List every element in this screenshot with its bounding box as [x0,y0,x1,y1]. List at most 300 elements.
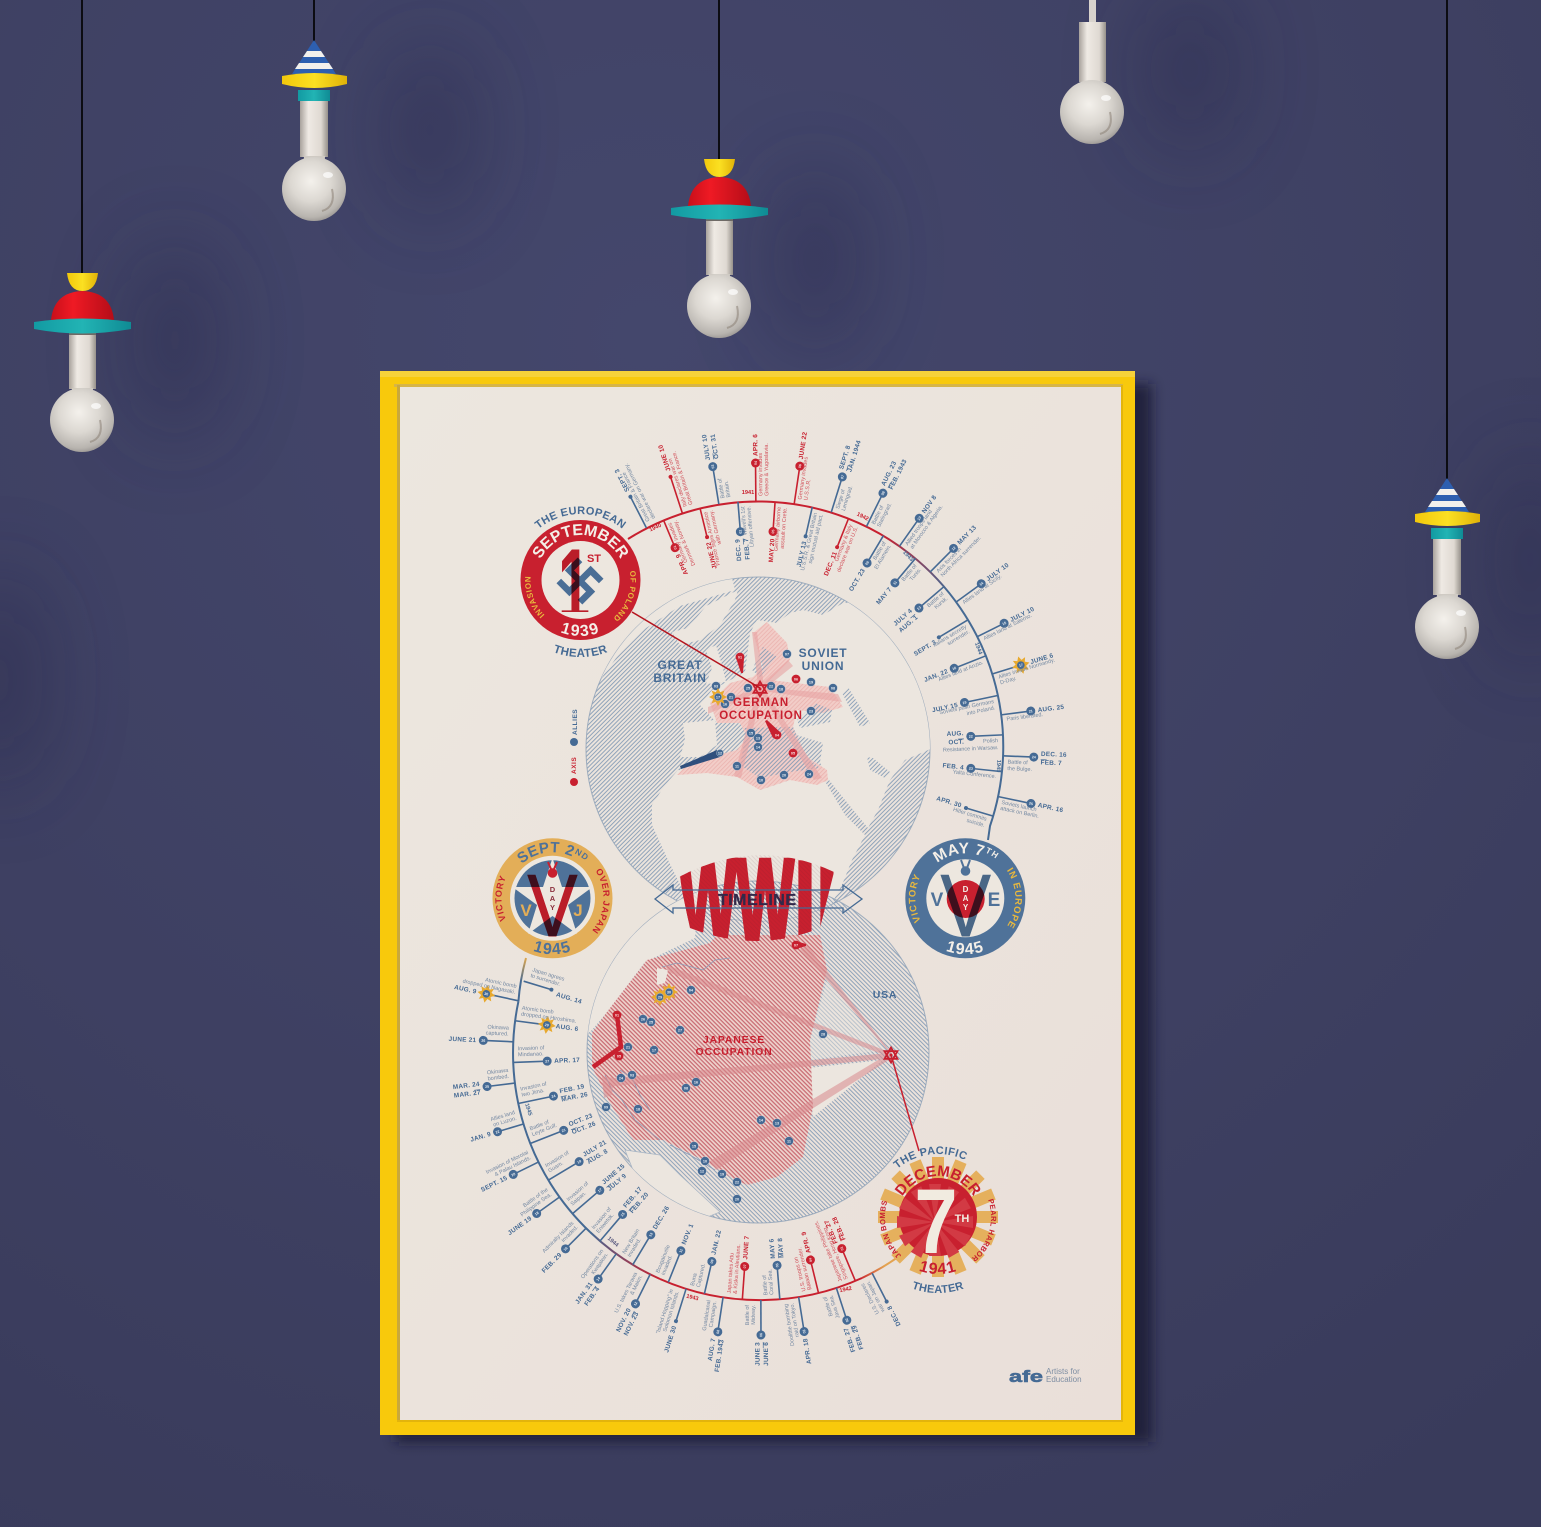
event: Okinawa captured [448,1023,514,1046]
badge: V-E day: A [963,894,969,903]
event: Crete: MAY 20 [768,538,777,563]
timeline years: Pacific [523,1103,853,1302]
label: German occupation: OCCUPATION [719,710,803,722]
event: Philippines, Singapore: 01 [839,1246,845,1251]
event: North Africa surrender: North Africa surrender. [940,535,983,578]
event: Sept 3: SEPT. 3 [614,467,631,493]
event: Mindanao: APR. 17 [554,1057,580,1065]
event: war on US: DEC. 11 [823,551,839,577]
event: Stalingrad: AUG. 23 [880,460,898,487]
marker: invasion of Poland star [754,682,766,696]
event: Kwajalein [566,1245,624,1310]
event: Attack on Berlin: attack on Berlin. [1000,806,1040,820]
event: Buna: Captured. [696,1263,707,1288]
event: Attack on Berlin: APR. 16 [1037,802,1064,814]
markers: atomic bomb stars [651,983,678,1006]
event: Anzio: 16 [952,666,957,671]
event: June 22 USSR: Germany invades [797,456,810,500]
land: Spain [680,720,717,757]
event: Java Sea: FEB. 27 [843,1327,857,1353]
label: Soviet Union: UNION [802,659,844,673]
event: Tunis: 11 [892,580,898,586]
event: Guadalcanal [696,1295,732,1373]
event: Tunis [874,555,926,613]
event: Battle of Britain: OCT. 31 [710,433,721,459]
marker: allied landing wedge: 12 [718,751,722,755]
lower globe: Pacific [580,870,929,1223]
event: Battle of the Bulge: 24 [1032,755,1036,759]
event: Sept 3: Great Britain & France [621,471,652,522]
event: Kwajalein: Kwajalein. [591,1252,610,1276]
event: Crete: Germany airborne [774,507,783,551]
event: June 22 USSR: 06 [798,464,802,468]
event: Battle of the Bulge: the Bulge. [1007,766,1033,773]
map markers Pacific: 17 [652,1048,656,1052]
event: Battle of Britain: JULY 10 [701,434,712,461]
event: North Africa surrender: Axis forces in [936,547,963,574]
event: Libyan offensive [731,501,757,561]
event: Midway: JUNE 3 [755,1342,762,1366]
event: Hiroshima: 29 [545,1023,549,1027]
markers: atomic bomb stars: 30 [667,990,671,994]
occupied Europe [677,622,843,790]
legend: axis and allies [570,709,579,786]
land: Africa [652,770,865,925]
event: Morotai: Invasion of Morotai [485,1150,529,1176]
event: Anzio: Allies land at Anzio. [938,660,985,683]
event: Okinawa bombed: MAR. 27 [454,1089,481,1100]
event: Okinawa bombed: Okinawa [487,1068,510,1076]
event: Libyan offensive: Libyan offensive. [746,505,756,547]
map markers Europe: 20 [782,773,786,777]
event: Warsaw: AUG. [947,730,964,738]
event: Attu and Kiska: Japan takes Attu [727,1253,736,1294]
event: Morocco and Algeria: at Morocco & Algeria. [909,504,945,550]
event: Soviets into Poland: 19 [962,700,967,705]
badge: V-E day: IN EUROPE [1007,867,1022,928]
event: New Britain: invaded. [627,1237,643,1258]
event: Morotai: SEPT. 15 [480,1175,509,1194]
event: Saipan: Invasion of [566,1181,590,1203]
event: Nagasaki: dropped on Nagasaki. [462,979,516,996]
event: Doolittle: raid on Tokyo. [789,1302,801,1337]
map markers Europe: 11 [735,764,739,768]
event: June 10: Great Britain & France. [671,450,695,506]
event: Sept 3 [613,462,659,529]
event: Luzon: on Luzon. [493,1116,518,1129]
map markers Pacific: 26 [641,1017,645,1021]
event: Battle of the Bulge: Battle of [1007,760,1028,766]
timeline years: European: 1940 [649,523,663,533]
timeline arc: Pacific theater [513,958,898,1300]
map markers Europe: 21 [729,695,733,699]
event: North Africa surrender: MAY 13 [956,524,978,546]
event: Philippine Sea [499,1184,562,1237]
event: Philippines, Singapore: FEB. 28 [831,1215,847,1241]
land: Australia [625,1150,720,1218]
event: Mindanao: 27 [545,1059,549,1064]
event: Stalingrad: FEB. 1943 [888,458,909,491]
event: Kursk: 13 [916,605,922,611]
badge: V-J day: OVER JAPAN [592,868,610,934]
event: Philippine Sea: 18 [534,1211,540,1217]
timeline years: European: 1945 [995,760,1001,772]
map markers Europe: 07 [785,652,789,656]
event: Admiralty Islands [531,1217,589,1275]
map markers Europe [712,650,837,784]
event: Midway: Midway. [751,1305,757,1325]
event: Okinawa bombed: 25 [485,1085,489,1089]
event: Midway: JUNE 6 [763,1342,770,1366]
event: Soviets into Poland [931,691,1001,724]
event: Nagasaki: 30 [484,992,489,996]
poster paper [400,387,1121,1420]
poster frame [380,371,1152,1442]
event: mutual aid pact: sign mutual aid pact. [808,513,825,564]
timeline arc: European theater [628,502,1003,840]
coastlines [605,958,730,1170]
map markers Pacific: 22 [735,1180,739,1184]
event: France armistice: JUNE 22 [705,541,719,570]
event: Guam: AUG. 8 [586,1148,609,1166]
event: Eniwetok: FEB. 17 [622,1186,644,1209]
event: Tarawa: 12 [633,1301,638,1307]
event: Crete: assault on Crete. [780,507,789,549]
event: Midway: 06 [759,1333,763,1337]
event: Saipan: Saipan. [570,1190,588,1207]
title: WWII: I [814,833,840,970]
attack arrows Pacific [602,945,893,1170]
event: Paris: 21 [1029,709,1033,714]
map markers Pacific: 03 [630,1073,634,1077]
event: Salerno: 15 [1002,621,1007,626]
event: Warsaw: OCT. [948,739,964,746]
event: Attu and Kiska: JUNE 7 [742,1235,751,1260]
event: Okinawa bombed [451,1067,516,1100]
event: Libyan offensive: FEB. 7 [743,538,752,560]
event: Morotai: & Palau Islands. [494,1155,533,1178]
event: Bataan [788,1230,823,1297]
timeline years: Pacific: 1945 [523,1103,533,1117]
title: WWII: I [792,833,818,970]
map markers Europe: 23 [809,709,813,713]
event: Leningrad: Leningrad. [841,485,855,512]
event: Soviets into Poland: JULY 15 [931,702,959,714]
event: Salerno: Allies land at Salerno. [983,613,1034,642]
event: Japan surrenders: AUG. 14 [555,991,583,1006]
map markers Pacific: 16 [694,1080,698,1084]
event: Leningrad: SEPT. 8 [838,444,852,470]
event: Mindanao [513,1044,580,1067]
timeline years: Pacific: 1944 [606,1236,620,1249]
event: Hitler suicide: Hitler commits [952,807,988,823]
map markers Europe: 08 [831,686,835,690]
badge: V-E day: V [941,857,991,955]
label: Great Britain: GREAT [657,658,703,672]
event: Anzio: JAN. 22 [923,668,949,684]
badge: V-J day: SEPT 2 [518,842,574,862]
event: Crete: 05 [771,529,775,534]
badge: Pearl Harbor: THEATER [911,1280,965,1296]
event: Stalingrad [861,454,914,533]
event: Eniwetok: Eniwetok. [596,1212,616,1235]
event: Tarawa: NOV. 20 [615,1307,633,1333]
marker: D-Day star [709,688,727,706]
event: El Alamein: Battle of [872,540,888,561]
badge: V-J day: V [528,857,578,955]
land: Great Britain [706,645,726,684]
label: Japanese occupation: OCCUPATION [695,1046,773,1058]
event: Philippines, Singapore: FEB. 27 [823,1219,840,1245]
event: Leningrad: JAN. 1944 [846,439,863,473]
event: Morocco and Algeria: Allied troops land [905,509,934,547]
event: Denmark and Norway: Denmark & Norway. [673,519,697,567]
event: Anzio [923,652,989,688]
event: Bataan: Bataan surrender. [797,1246,813,1290]
link: Pearl Harbor star to badge [891,1055,919,1151]
event: Crete [766,501,789,563]
event: Guam: 19 [577,1159,582,1165]
event: Battle of the Bulge [1002,749,1067,774]
event: Philippines, Singapore: Japanese take Philippines, [813,1219,844,1282]
title: WWII: W [736,835,794,971]
badge: invasion of Poland: INVASION [525,576,544,618]
event: Leyte Gulf: Battle of [529,1119,550,1132]
event: Guam: Invasion of [544,1150,571,1169]
icon: peace sign hand [548,862,557,877]
event: Bataan: APR. 9 [801,1231,813,1254]
event: Warsaw: 22 [969,735,973,739]
event: Warsaw: Polish [983,738,998,745]
event: Philippines, Singapore [813,1212,864,1287]
timeline years: European: 1941 [742,490,754,496]
map markers Pacific: 15 [692,1144,696,1148]
map markers Europe: 19 [809,680,813,684]
badge: V-J day: ND [574,848,588,860]
event: June 22 USSR: JUNE 22 [798,431,809,460]
event: June 22 USSR [790,431,819,506]
title: WWII: W [679,835,737,971]
lamp: red and teal left [34,0,131,452]
event: Tunis: Battle of [901,563,919,583]
event: Philippine Sea: Philippine Sea. [520,1192,553,1218]
lamp: striped cone right [1415,0,1480,659]
event: North Africa surrender: 12 [951,546,957,551]
event: Bougainville: Bougainville [655,1244,672,1274]
event: Leyte Gulf [524,1104,597,1152]
label: Japanese occupation: JAPANESE [703,1034,765,1046]
map markers Europe: 14 [756,745,761,749]
badge: V-J day: J [573,901,583,920]
event: Italy surrenders [912,618,975,665]
map markers Pacific: 19 [720,1172,724,1176]
event: Leyte Gulf: Leyte Gulf. [531,1122,559,1138]
event: Doolittle: 03 [802,1329,807,1334]
event: Stalingrad: 08 [881,491,886,496]
event: Leyte Gulf: OCT. 23 [568,1112,594,1128]
event: Saipan: JUNE 15 [601,1163,627,1186]
event: Admiralty Islands: FEB. 29 [541,1252,564,1275]
event: Paris: Paris liberated. [1006,712,1044,723]
event: Battle of Britain [701,431,733,505]
badge: invasion of Poland: THE EUROPEAN [534,506,626,528]
event: war on US: Germany & Italy [834,524,854,563]
icon: peace sign hand [961,860,970,875]
event: Libyan offensive: Wavell's 1st [740,506,749,536]
event: Apr 6: Germany invades [758,453,764,496]
event: mutual aid pact: JULY 13 [796,540,808,568]
event: Saipan: 17 [597,1188,603,1193]
event: Italy surrenders: Italians secretly [932,624,968,649]
markers: axis advances: 05 [791,751,795,755]
event: Yalta: Yalta Conference. [952,770,997,780]
event: mutual aid pact [795,506,826,573]
event: Buna: JAN. 22 [711,1229,723,1256]
event: Guadalcanal: Campaign. [708,1300,718,1328]
event: Mindanao: Invasion of [518,1045,545,1052]
event: Tunis: Tunis. [909,567,923,582]
event: Tunis: MAY 7 [875,586,894,606]
event: Iwo Jima: FEB. 19 [559,1083,585,1095]
badge: V-E day [905,838,1025,959]
event: Buna: Buna [690,1272,699,1287]
event: Iwo Jima [515,1074,589,1112]
event: D-Day: JUNE 6 [1030,652,1055,666]
event: Admiralty Islands: 16 [563,1246,569,1252]
event: Bougainville [653,1218,696,1284]
event: Iwo Jima: 24 [551,1094,556,1099]
event: North Africa surrender [927,523,986,582]
label: Great Britain: BRITAIN [653,671,707,685]
map markers Pacific: 27 [678,1028,682,1032]
badge: V-J day: 1945 [534,940,570,954]
event: Stalingrad: Battle of [871,504,886,526]
event: Guam: JULY 21 [582,1139,608,1158]
legend: axis and allies: ALLIES [572,709,579,735]
event: Attu and Kiska: & Kiska in Aleutians. [733,1243,742,1294]
event: Bataan: 04 [808,1257,813,1262]
event: Island hopping [651,1284,690,1354]
event: mutual aid pact: U.S.S.R. & Great Britain [800,512,819,571]
map markers Pacific: 04 [689,988,694,992]
event: Luzon [466,1109,525,1144]
event: Coral Sea [759,1237,789,1300]
sunburst tabs [878,1157,998,1277]
map markers Pacific: 13 [775,1121,779,1125]
event: Libyan offensive: 02 [739,530,743,534]
map markers Pacific: 08 [684,1086,688,1090]
event: Morocco and Algeria [896,493,947,554]
inland seas [740,647,890,778]
event: France armistice [697,505,728,570]
event: Japan surrenders: Japan agrees [531,967,565,983]
event: Java Sea [821,1285,865,1356]
event: Leyte Gulf: OCT. 26 [571,1120,597,1136]
wall shadows [0,0,1541,790]
event: D-Day: 17 [1018,663,1023,668]
event: Morotai: 20 [511,1172,516,1177]
event: Guadalcanal: Guadalcanal [702,1300,712,1331]
event: Okinawa captured: captured. [486,1031,509,1038]
event: Italy surrenders: SEPT. 3 [913,639,938,658]
event: Coral Sea: 05 [775,1263,780,1267]
event: New Britain: 13 [648,1232,654,1238]
event: Kwajalein: FEB. 4 [583,1286,602,1307]
badge: invasion of Poland: SEPTEMBER [532,524,628,559]
event: Admiralty Islands: invaded. [561,1224,580,1244]
map markers Europe: 24 [807,772,812,776]
event: Sicily: JULY 10 [985,562,1011,583]
event: Salerno: JULY 10 [1009,606,1036,624]
land: Korea [657,968,668,985]
map markers Europe: 15 [749,731,753,735]
event: Warsaw: Resistance in Warsaw. [943,745,999,754]
event: Luzon: 22 [495,1130,500,1135]
rays inside the red disc [897,1184,973,1258]
event: Battle of Britain: 03 [711,464,715,469]
markers: axis advances [736,653,800,757]
event: Guadalcanal: AUG. 7 [707,1338,717,1361]
map markers Pacific: 25 [649,1020,653,1024]
event: Morocco and Algeria: NOV 8 [921,494,938,515]
event: Apr 6: APR. 6 [752,434,759,456]
event: Attu and Kiska [726,1234,751,1300]
event: war on US: declare war on U.S. [836,526,860,573]
event: Hiroshima: Atomic bomb [521,1006,554,1016]
event: Yalta: FEB. 4 [942,762,964,772]
markers: axis advances Pacific [593,941,806,1067]
event: Hitler suicide: APR. 30 [935,795,962,809]
badge: V-E day: E [988,890,1000,911]
badge: V-E day: V [931,890,944,911]
event: Philippine Sea: JUNE 19 [507,1215,533,1237]
marker: Pearl Harbor star [884,1048,898,1062]
lamp: striped cone left [282,0,347,221]
event: Island hopping: JUNE 30 [663,1325,678,1354]
badge: V-E day: TH [986,847,999,858]
badge: V-J day: V [520,901,532,920]
event: Denmark and Norway: Germany invades [667,521,689,564]
event: Guadalcanal: 08 [716,1330,720,1334]
event: Saipan: JULY 9 [606,1173,628,1193]
event: Paris [1000,702,1065,723]
event: Bougainville: 11 [679,1248,684,1253]
badge: V-E day: Y [963,903,969,912]
event: US declares war [858,1271,903,1333]
event: Kursk [892,582,953,638]
event: Nagasaki: AUG. 9 [453,984,477,996]
badge: Pearl Harbor: TH [955,1213,969,1225]
event: Luzon: Allies land [490,1110,516,1123]
event: Japan surrenders: to surrender. [530,973,561,988]
event: Libyan offensive: DEC. 9 [734,538,743,561]
event: Island hopping: Solomon Islands. [662,1290,681,1333]
badge: Pearl Harbor: 1941 [918,1258,958,1278]
event: Kwajalein: Operations on [580,1249,605,1280]
title: WWII [655,833,862,971]
badge: Pearl Harbor [878,1145,998,1296]
event: Iwo Jima: Iwo Jima. [521,1088,545,1099]
badge: V-E day: 1945 [946,940,983,954]
event: Eniwetok [588,1179,650,1247]
badge: Pearl Harbor: DECEMBER [894,1165,980,1196]
event: Eniwetok: Invasion of [591,1206,613,1231]
event: Morotai [474,1148,540,1194]
event: Nagasaki [452,971,522,1010]
event: Coral Sea: MAY 8 [777,1237,785,1258]
event: Coral Sea: Coral Sea. [767,1268,775,1295]
map markers Pacific: 10 [703,1159,707,1163]
